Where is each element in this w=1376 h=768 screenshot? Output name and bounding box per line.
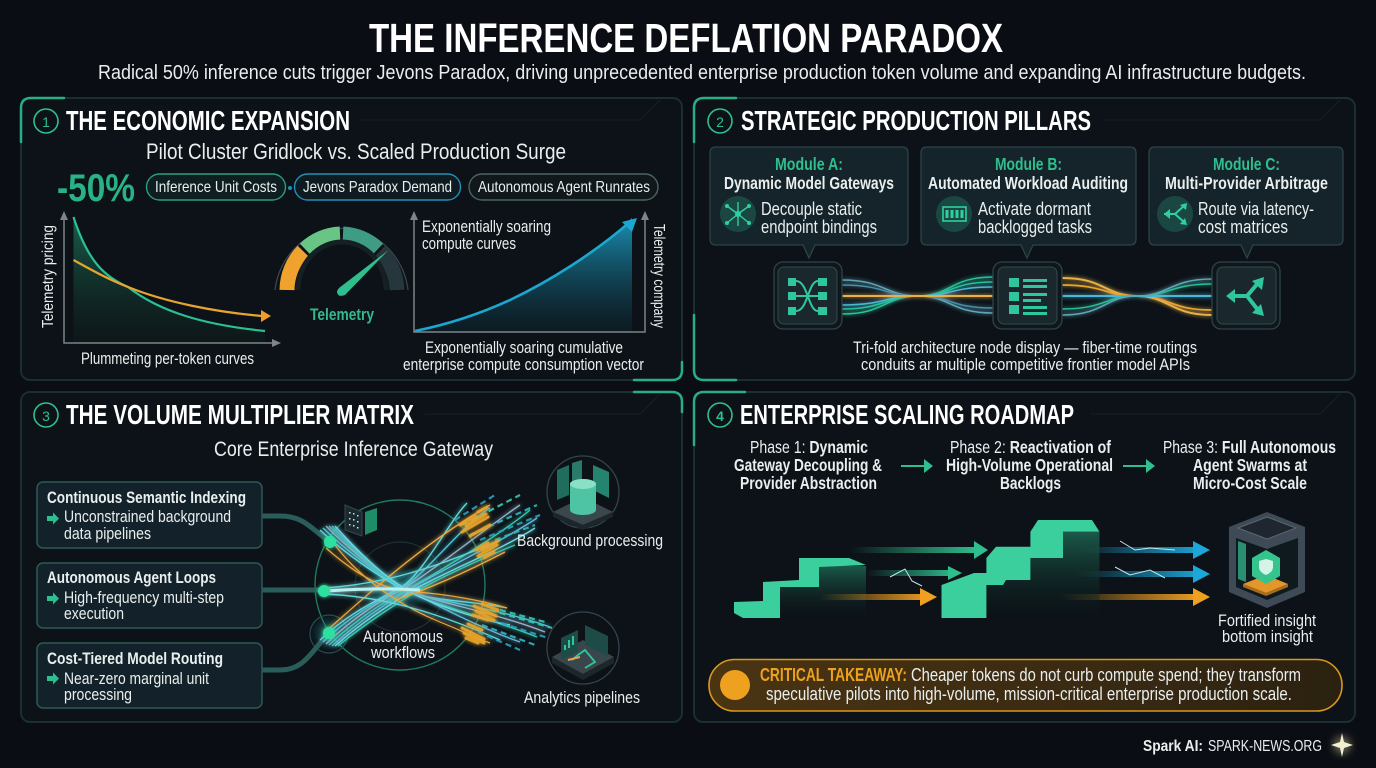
card: continuous semantic indexing: data pipelines bbox=[64, 524, 151, 543]
label: analytics pipelines: Analytics pipelines bbox=[524, 688, 640, 707]
title: THE INFERENCE DEFLATION PARADOX bbox=[369, 15, 1003, 61]
label: background processing: Background processing bbox=[517, 531, 663, 550]
panel: the volume multiplier matrix bbox=[21, 392, 682, 722]
heading: strategic production pillars: STRATEGIC PRODUCTION PILLARS bbox=[741, 105, 1091, 136]
label: autonomous workflows: Autonomous bbox=[363, 628, 443, 646]
module C card: Route via latency- bbox=[1198, 198, 1314, 219]
stat: minus 50 percent: -50% bbox=[57, 167, 135, 210]
card: cost-tiered model routing: processing bbox=[64, 685, 132, 704]
chart: soaring compute consumption: Telemetry company bbox=[650, 224, 667, 328]
gauge: telemetry: Telemetry bbox=[310, 305, 374, 324]
module A card: endpoint bindings bbox=[761, 216, 877, 237]
chart: plummeting per-token pricing: Telemetry pricing bbox=[40, 225, 57, 328]
callout: critical takeaway: Cheaper tokens do not curb compute spend; they transform bbox=[911, 665, 1301, 685]
card: autonomous agent loops: High-frequency multi-step bbox=[64, 588, 224, 607]
card: cost-tiered model routing: Near-zero marginal unit bbox=[64, 669, 209, 688]
heading: enterprise scaling roadmap bbox=[708, 399, 1074, 430]
icon: building and server bbox=[345, 505, 377, 536]
node A: gateway bbox=[774, 262, 842, 329]
phase 2: Phase 2: Reactivation of bbox=[950, 437, 1111, 457]
module A card: Decouple static bbox=[761, 198, 862, 219]
caption: fortified insight: bottom insight bbox=[1222, 627, 1313, 646]
icon: spark star bbox=[1331, 733, 1353, 757]
chart: soaring compute consumption bbox=[403, 211, 667, 374]
heading: strategic production pillars bbox=[708, 105, 1091, 136]
caption: fortified insight: Fortified insight bbox=[1218, 611, 1316, 630]
phase 3: Agent Swarms at bbox=[1193, 455, 1307, 475]
pills: Autonomous Agent Runrates bbox=[478, 179, 650, 196]
node C: arbitrage bbox=[1212, 262, 1280, 329]
card: cost-tiered model routing bbox=[37, 643, 262, 708]
footer credit bbox=[1143, 738, 1322, 755]
icon: fortified vault bbox=[1229, 512, 1305, 608]
module C card: Module C: bbox=[1213, 154, 1280, 174]
phase 1: Provider Abstraction bbox=[740, 473, 877, 493]
card: continuous semantic indexing bbox=[37, 482, 262, 548]
module C card: cost matrices bbox=[1198, 216, 1288, 237]
chart: soaring compute consumption: compute curves bbox=[422, 235, 516, 253]
module B card: Module B: bbox=[995, 154, 1062, 174]
arrow: phase 1 to 2 bbox=[901, 459, 933, 473]
gauge: telemetry bbox=[275, 229, 408, 324]
card: continuous semantic indexing: Unconstrained background bbox=[64, 507, 231, 526]
caption bbox=[853, 338, 1197, 374]
heading: the economic expansion bbox=[34, 105, 350, 136]
staircase: early steps bbox=[734, 558, 866, 618]
arrow: phase 2 to 3 bbox=[1123, 459, 1155, 473]
gateway network bbox=[262, 495, 552, 670]
label: autonomous workflows: workflows bbox=[370, 644, 435, 662]
chart: soaring compute consumption: enterprise compute consumption vector bbox=[403, 355, 644, 374]
phase 1: Phase 1: Dynamic bbox=[750, 437, 868, 457]
module C card: Multi-Provider Arbitrage bbox=[1165, 173, 1328, 193]
chart: soaring compute consumption: Exponentially soaring bbox=[422, 218, 551, 236]
phase 2: High-Volume Operational bbox=[946, 455, 1113, 475]
module B card: backlogged tasks bbox=[978, 216, 1092, 237]
module B card: Activate dormant bbox=[978, 198, 1091, 219]
pills: Inference Unit Costs bbox=[155, 179, 277, 196]
module C card bbox=[1149, 147, 1343, 258]
flow arrows bbox=[820, 541, 1210, 606]
card: continuous semantic indexing: Continuous Semantic Indexing bbox=[47, 488, 246, 507]
card: autonomous agent loops bbox=[37, 563, 262, 628]
card: autonomous agent loops: Autonomous Agent Loops bbox=[47, 568, 216, 587]
panel: enterprise scaling roadmap bbox=[694, 392, 1355, 722]
phase 2: Backlogs bbox=[1000, 473, 1061, 493]
module A card bbox=[710, 147, 908, 258]
pills: Jevons Paradox Demand bbox=[303, 179, 452, 196]
caption: Tri-fold architecture node display — fiber-time routings bbox=[853, 338, 1197, 357]
phase 3 bbox=[1163, 437, 1336, 493]
phase 2 bbox=[946, 437, 1113, 493]
chart: soaring compute consumption: Exponentially soaring cumulative bbox=[425, 338, 623, 357]
callout: critical takeaway: speculative pilots into high-volume, mission-critical enterprise production scale. bbox=[766, 684, 1292, 704]
subheading: Pilot Cluster Gridlock vs. Scaled Production Surge bbox=[146, 139, 566, 164]
heading: the economic expansion: THE ECONOMIC EXPANSION bbox=[66, 105, 350, 136]
panel: the economic expansion bbox=[21, 98, 682, 380]
icon: background processing bbox=[547, 456, 619, 530]
chart: plummeting per-token pricing: Plummeting per-token curves bbox=[81, 349, 254, 368]
heading: enterprise scaling roadmap: ENTERPRISE SCALING ROADMAP bbox=[740, 399, 1074, 430]
pills bbox=[146, 174, 658, 200]
phase 1 bbox=[734, 437, 882, 493]
panel: strategic production pillars bbox=[694, 98, 1355, 380]
node B: audit list bbox=[993, 262, 1062, 329]
phase 3: Phase 3: Full Autonomous bbox=[1163, 437, 1336, 457]
callout: critical takeaway bbox=[709, 660, 1342, 711]
fiber conduits bbox=[842, 277, 1212, 315]
module B card: Automated Workload Auditing bbox=[928, 173, 1128, 193]
module B card bbox=[921, 147, 1136, 258]
heading: the volume multiplier matrix: THE VOLUME MULTIPLIER MATRIX bbox=[66, 399, 414, 430]
caption: fortified insight bbox=[1218, 611, 1316, 646]
phase 1: Gateway Decoupling & bbox=[734, 455, 882, 475]
heading: the volume multiplier matrix: 3 bbox=[42, 408, 50, 424]
footer credit: Spark AI: bbox=[1143, 738, 1203, 755]
heading: the economic expansion: 1 bbox=[42, 114, 50, 130]
icon: analytics pipelines bbox=[547, 612, 619, 684]
staircase: later steps bbox=[942, 520, 1100, 620]
footer credit: SPARK-NEWS.ORG bbox=[1208, 738, 1322, 755]
module A card: Module A: bbox=[775, 154, 843, 174]
chart: plummeting per-token pricing bbox=[40, 211, 281, 368]
card: autonomous agent loops: execution bbox=[64, 604, 124, 623]
callout: critical takeaway: CRITICAL TAKEAWAY: bbox=[760, 665, 907, 685]
phase 3: Micro-Cost Scale bbox=[1193, 473, 1307, 493]
card: cost-tiered model routing: Cost-Tiered Model Routing bbox=[47, 649, 223, 668]
heading: enterprise scaling roadmap: 4 bbox=[716, 408, 724, 424]
icon: amber dot bbox=[720, 670, 750, 700]
caption: conduits ar multiple competitive frontier model APIs bbox=[861, 355, 1190, 374]
label: autonomous workflows bbox=[363, 628, 443, 662]
module A card: Dynamic Model Gateways bbox=[724, 173, 894, 193]
heading: strategic production pillars: 2 bbox=[716, 114, 724, 130]
subheading: Core Enterprise Inference Gateway bbox=[214, 438, 493, 461]
